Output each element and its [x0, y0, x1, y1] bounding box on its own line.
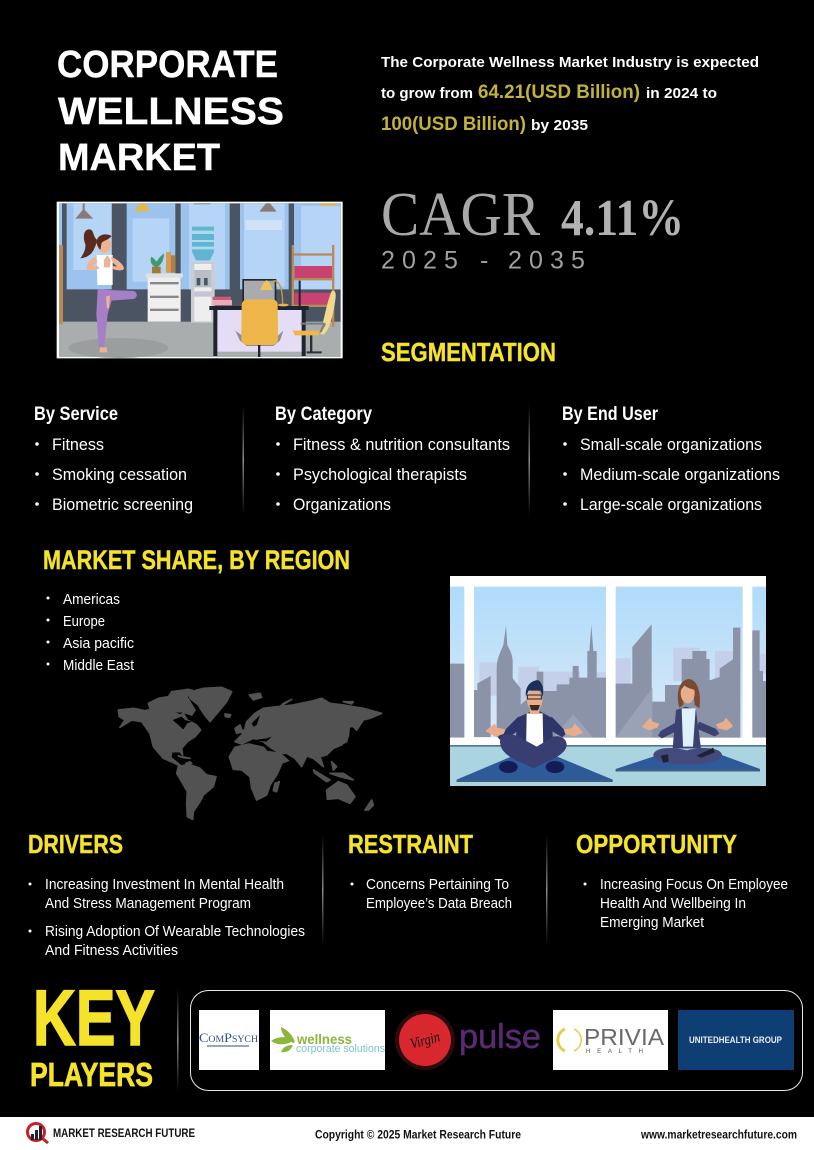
- panel: by category: Psychological therapists: [293, 465, 467, 484]
- panel: by end user: Medium-scale organizations: [580, 465, 780, 484]
- market size statement: 100(USD Billion): [381, 114, 526, 135]
- region list: Middle East: [63, 657, 135, 674]
- logo: wellness corporate solutions: corporate solutions: [296, 1043, 385, 1055]
- market size statement: to grow from: [381, 85, 473, 102]
- woman: [80, 229, 137, 352]
- water cooler: [191, 227, 215, 323]
- panel: drivers: Rising Adoption Of Wearable Technologies: [45, 923, 305, 940]
- panel: key player logos: [190, 990, 802, 1090]
- CAGR callout: [381, 181, 684, 274]
- panel: by category: By Category: [275, 404, 372, 425]
- heading: key players: PLAYERS: [30, 1056, 153, 1093]
- title: [57, 44, 284, 179]
- office chair: [235, 299, 283, 357]
- panel: by end user: By End User: [562, 404, 659, 425]
- illustration: business people meditating: [450, 576, 766, 786]
- panel: by service: Biometric screening: [52, 495, 193, 514]
- man meditating: [485, 680, 583, 773]
- panel: by category: Organizations: [293, 495, 391, 514]
- heading: key players: KEY: [33, 973, 155, 1062]
- region list: [46, 591, 135, 674]
- CAGR callout: CAGR: [381, 181, 541, 249]
- logo: Virgin Pulse: pulse: [459, 1018, 541, 1056]
- panel: by category: Fitness & nutrition consultants: [293, 435, 510, 454]
- footer: MARKET RESEARCH FUTURE: [53, 1126, 195, 1140]
- region list: Americas: [63, 591, 120, 608]
- title: WELLNESS: [58, 91, 284, 133]
- logo: UnitedHealth Group: [678, 1010, 794, 1070]
- logo: wellness corporate solutions: wellness: [296, 1031, 352, 1047]
- icon: magnifier logo: [28, 1124, 48, 1143]
- panel: drivers: DRIVERS: [28, 829, 123, 859]
- skyline: [450, 624, 766, 743]
- panel: drivers: Increasing Investment In Mental Health: [45, 876, 284, 893]
- panel: by category: [275, 404, 510, 514]
- panel: drivers: And Fitness Activities: [45, 942, 178, 959]
- logo: Virgin Pulse: Virgin: [409, 1029, 442, 1053]
- footer: [0, 1117, 814, 1150]
- market size statement: in 2024 to: [646, 85, 717, 102]
- logo: Privia Health: PRIVIA: [584, 1024, 665, 1050]
- world map: [118, 687, 382, 819]
- panel: by end user: Large-scale organizations: [580, 495, 762, 514]
- panel: by service: [34, 404, 193, 514]
- panel: restraint: Concerns Pertaining To: [366, 876, 509, 893]
- panel: opportunity: [576, 829, 788, 931]
- panel: opportunity: OPPORTUNITY: [576, 829, 737, 859]
- panel: restraint: Employee’s Data Breach: [366, 895, 512, 912]
- bookshelf: [292, 245, 334, 327]
- panel: by service: Smoking cessation: [52, 465, 187, 484]
- market size statement: 64.21(USD Billion): [478, 82, 640, 103]
- illustration: woman doing yoga in office: [57, 202, 343, 358]
- CAGR callout: 4.11%: [561, 190, 684, 247]
- CAGR callout: 2025-2035: [381, 246, 585, 274]
- logo: ComPsych: ComPsych: [199, 1030, 259, 1045]
- footer: Copyright © 2025 Market Research Future: [315, 1128, 521, 1142]
- logo: ComPsych: [199, 1010, 259, 1070]
- heading: segmentation: SEGMENTATION: [381, 337, 556, 367]
- heading: key players: [30, 973, 155, 1093]
- market size statement: The Corporate Wellness Market Industry is expected: [381, 54, 759, 71]
- panel: drivers: [28, 829, 305, 959]
- logo: Privia Health: [553, 1010, 668, 1070]
- panel: opportunity: Emerging Market: [600, 914, 705, 931]
- region list: Europe: [63, 613, 105, 630]
- panel: opportunity: Health And Wellbeing In: [600, 895, 746, 912]
- panel: restraint: RESTRAINT: [348, 829, 473, 859]
- logo: wellness corporate solutions: [270, 1010, 385, 1070]
- panel: drivers: And Stress Management Program: [45, 895, 251, 912]
- title: CORPORATE: [57, 44, 278, 86]
- yoga mats: [457, 754, 760, 782]
- drawers: [146, 252, 183, 322]
- panel: by service: Fitness: [52, 435, 104, 454]
- side chair: [293, 291, 336, 353]
- panel: by service: By Service: [34, 404, 118, 425]
- region list: Asia pacific: [63, 635, 134, 652]
- panel: by end user: [562, 404, 780, 514]
- desk: [209, 279, 309, 356]
- panel: restraint: [348, 829, 512, 912]
- panel: by end user: Small-scale organizations: [580, 435, 762, 454]
- panel: opportunity: Increasing Focus On Employee: [600, 876, 788, 893]
- logo: Virgin Pulse: [395, 1010, 541, 1070]
- logo: UnitedHealth Group: UNITEDHEALTH GROUP: [689, 1035, 782, 1045]
- market size statement: [381, 54, 759, 135]
- market size statement: by 2035: [531, 117, 588, 134]
- logo: Privia Health: HEALTH: [586, 1049, 643, 1055]
- woman meditating: [642, 679, 733, 764]
- heading: market share by region: MARKET SHARE, BY REGION: [43, 545, 350, 575]
- title: MARKET: [58, 137, 220, 179]
